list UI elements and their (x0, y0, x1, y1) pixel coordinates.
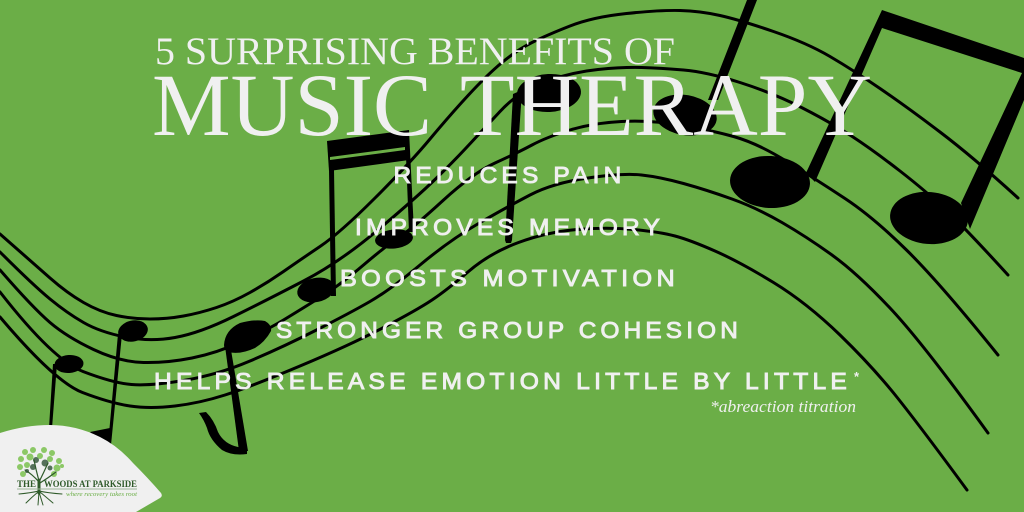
footnote: *abreaction titration (710, 397, 856, 416)
large note behind RAPY (650, 0, 757, 140)
small note, far left (49, 354, 84, 428)
benefit 3: BOOSTS MOTIVATION (340, 265, 679, 291)
icon: tree (17, 447, 64, 505)
logo wordmark: where recovery takes root (66, 491, 137, 498)
logo wordmark: WOODS AT PARKSIDE (44, 479, 137, 489)
title line 2 (152, 57, 872, 155)
logo panel (0, 425, 162, 512)
benefit 2: IMPROVES MEMORY (355, 214, 664, 240)
beamed note pair (295, 130, 414, 306)
eighth note with curled flag (199, 320, 271, 454)
small note with flag behind logo (90, 318, 150, 445)
benefit 1: REDUCES PAIN (394, 162, 626, 188)
title line 2: THERAPY (460, 57, 872, 155)
title line 1: 5 SURPRISING BENEFITS OF (155, 30, 675, 73)
title line 2: MUSIC (152, 57, 432, 155)
benefit 5: HELPS RELEASE EMOTION LITTLE BY LITTLE (154, 368, 851, 394)
logo wordmark: THE (17, 479, 36, 489)
logo wordmark (17, 479, 137, 498)
benefit 4: STRONGER GROUP COHESION (276, 317, 742, 343)
large beamed note pair, top right (729, 10, 1024, 247)
single note behind title (505, 72, 582, 243)
footnote asterisk: * (854, 369, 860, 384)
